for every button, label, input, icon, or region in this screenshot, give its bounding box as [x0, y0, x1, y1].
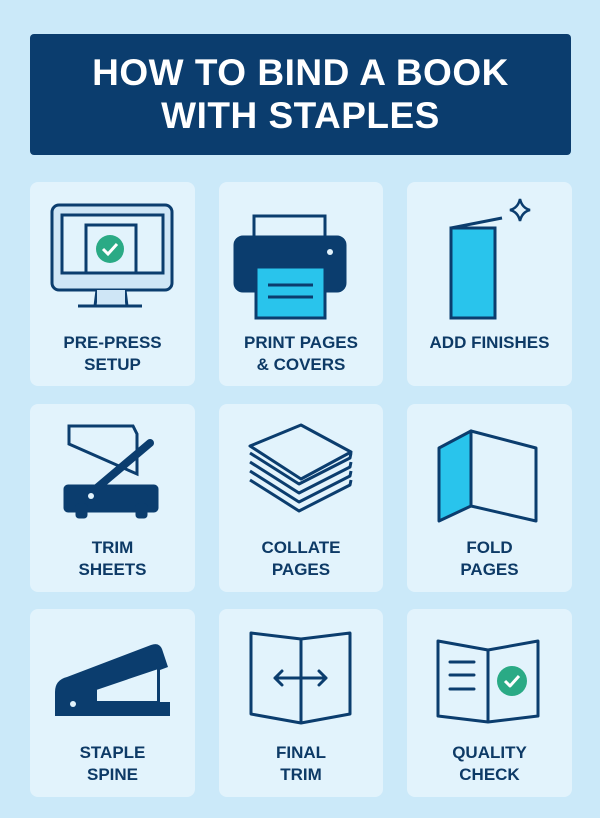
panel: trim sheets: [30, 404, 195, 592]
icon: stacked sheets: [248, 424, 353, 512]
label: FINAL: [276, 743, 326, 762]
label: PAGES: [460, 560, 519, 579]
icon: open book with arrows: [250, 632, 352, 724]
label: [80, 743, 145, 784]
icon: printer: [234, 214, 346, 320]
label: [78, 538, 147, 579]
label: & COVERS: [257, 355, 345, 374]
panel: add finishes: [407, 182, 572, 386]
label: [63, 333, 162, 374]
title: HOW TO BIND A BOOK: [92, 52, 509, 93]
label: CHECK: [459, 765, 520, 784]
panel: pre-press setup: [30, 182, 195, 386]
label: PRE-PRESS: [63, 333, 162, 352]
panel: staple spine: [30, 609, 195, 797]
panel: collate pages: [219, 404, 383, 592]
label: SPINE: [87, 765, 138, 784]
title: WITH STAPLES: [161, 95, 440, 136]
label: [244, 333, 358, 374]
label: [460, 538, 519, 579]
label: SETUP: [84, 355, 141, 374]
label: TRIM: [92, 538, 133, 557]
label: [261, 538, 340, 579]
label: STAPLE: [80, 743, 145, 762]
label: PRINT PAGES: [244, 333, 358, 352]
icon: paper cutter: [64, 424, 158, 518]
label: TRIM: [280, 765, 322, 784]
label: COLLATE: [261, 538, 340, 557]
panel: quality check: [407, 609, 572, 797]
icon: folded sheet: [438, 429, 538, 522]
label: ADD FINISHES: [430, 333, 549, 352]
icon: monitor with check: [50, 204, 174, 308]
label: FOLD: [466, 538, 513, 557]
title: [30, 34, 571, 155]
panel: final trim: [219, 609, 383, 797]
label: QUALITY: [452, 743, 527, 762]
panel: fold pages: [407, 404, 572, 592]
icon: booklet with sparkle: [450, 198, 530, 320]
icon: stapler: [55, 644, 170, 716]
label: PAGES: [272, 560, 330, 579]
label: [452, 743, 527, 784]
label: SHEETS: [78, 560, 147, 579]
label: [276, 743, 326, 784]
icon: book with check: [436, 640, 540, 724]
panel: print pages: [219, 182, 383, 386]
